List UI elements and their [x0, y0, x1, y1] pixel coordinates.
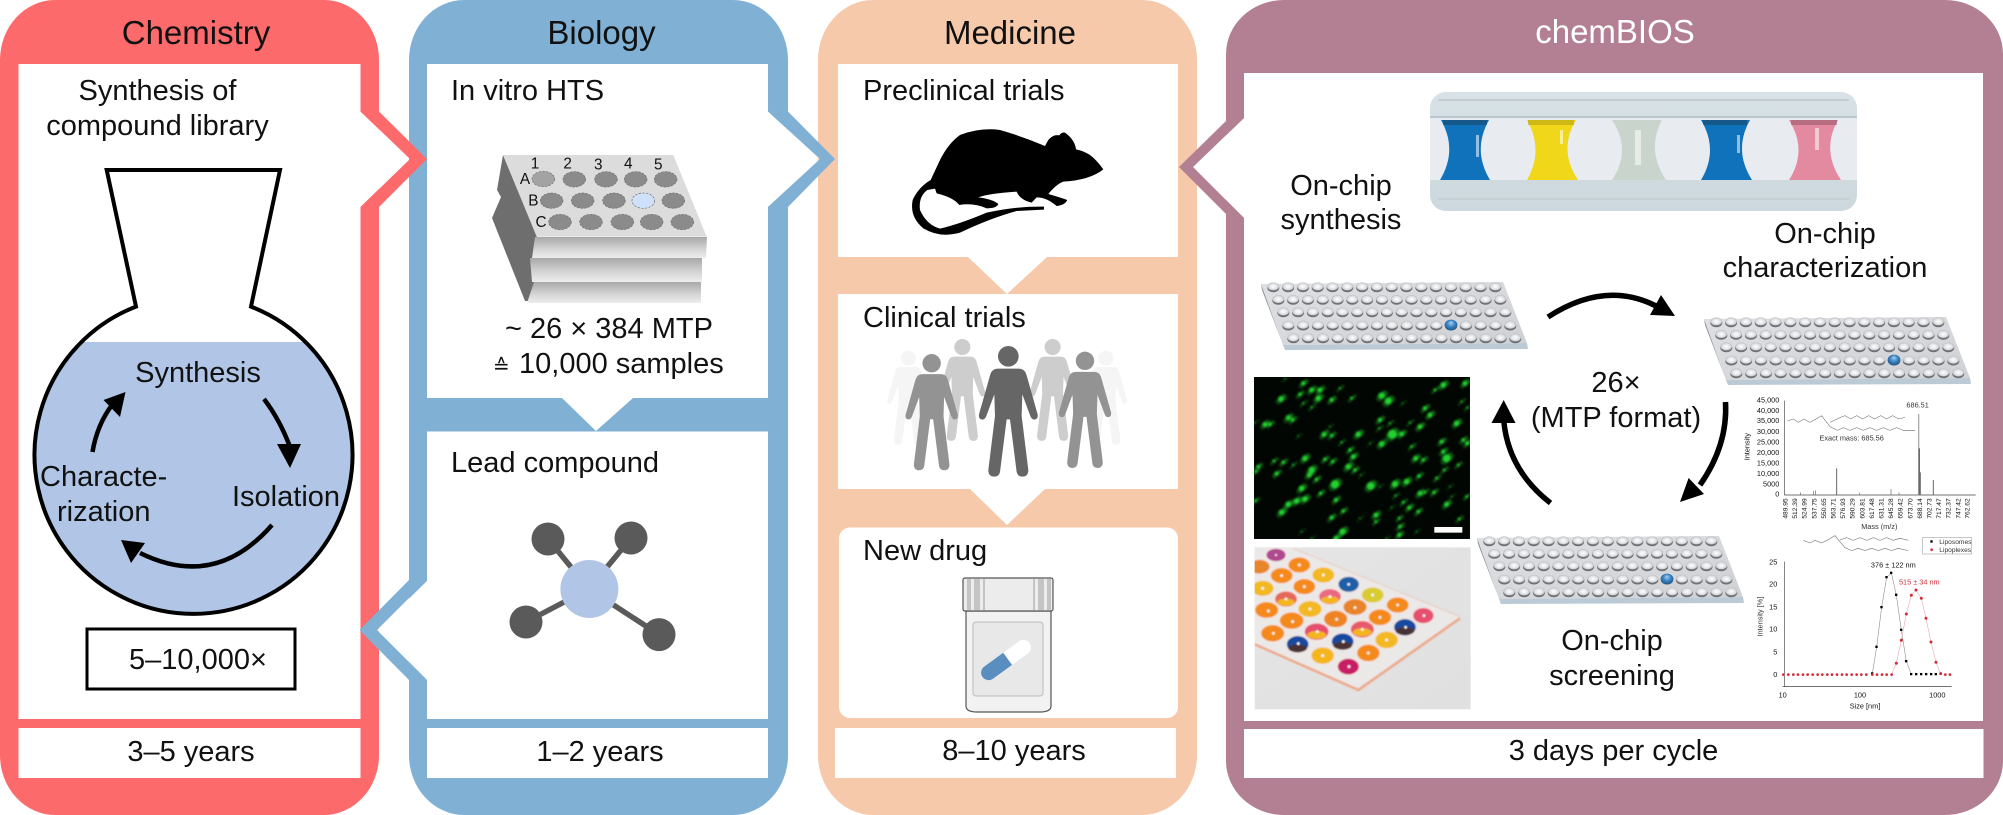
panel: biology: [377, 0, 820, 815]
arrow: isolation to characterization: [121, 525, 272, 566]
photo: coloured droplets on chip: [1430, 92, 1857, 211]
chart: mass spectrum: 45,000: [1757, 396, 1779, 405]
chart: size distribution: Intensity [%]: [1756, 597, 1765, 637]
chart: mass spectrum: 550.65: [1821, 498, 1828, 519]
callout: 5–10,000×: [87, 629, 295, 689]
icon: lead compound molecule: [510, 522, 676, 651]
chart: mass spectrum: 702.73: [1926, 498, 1933, 519]
text: synthesis of compound library: Synthesis of: [79, 75, 237, 107]
icon: stacked well plates: C: [535, 214, 547, 231]
chart: size distribution: 5: [1773, 647, 1777, 656]
chart: mass spectrum: 603.81: [1859, 498, 1866, 519]
heading: chemBIOS: chemBIOS: [1535, 13, 1695, 50]
chart: mass spectrum: 10,000: [1757, 469, 1779, 478]
chart: mass spectrum: Exact mass: 685.56: [1819, 434, 1884, 443]
chart: mass spectrum: 30,000: [1757, 427, 1779, 436]
icon: chip on-chip synthesis: [1261, 282, 1528, 350]
chart: mass spectrum: 617.48: [1869, 498, 1876, 519]
text: 26× (MTP format): 26×: [1591, 367, 1641, 399]
arrow: screening to synthesis: [1492, 400, 1550, 503]
text: 3 days per cycle: 3 days per cycle: [1509, 735, 1718, 767]
chart: mass spectrum: 686.51: [1906, 401, 1929, 410]
icon: chip on-chip screening: [1477, 536, 1744, 604]
label: Characterization: Characte-: [40, 461, 167, 493]
chart: size distribution: 10: [1779, 691, 1787, 700]
text: On-chip characterization: characterization: [1723, 252, 1927, 284]
chart: mass spectrum: 659.42: [1898, 498, 1905, 519]
photo: droplet microarray slide: [1249, 547, 1471, 709]
text: plate count: ≙: [493, 356, 510, 378]
icon: chip on-chip characterization: [1704, 317, 1971, 385]
icon: stacked well plates: 4: [624, 156, 633, 173]
chart: mass spectrum: 20,000: [1757, 448, 1779, 457]
text: On-chip synthesis: synthesis: [1281, 204, 1401, 236]
text: 3–5 years: 3–5 years: [127, 736, 255, 768]
heading: Biology: Biology: [547, 14, 656, 51]
arrow: synthesis to isolation: [264, 399, 301, 468]
icon: stacked well plates: 1: [531, 156, 539, 173]
chart: mass spectrum: 645.28: [1888, 498, 1895, 519]
text: 8–10 years: 8–10 years: [942, 735, 1086, 767]
chart: mass spectrum: Mass (m/z): [1861, 522, 1897, 531]
chart: mass spectrum: 747.42: [1955, 498, 1962, 519]
chart: mass spectrum: 512.39: [1792, 498, 1799, 519]
text: plate count: 10,000 samples: [519, 348, 724, 380]
chart: size distribution: 20: [1769, 580, 1777, 589]
chart: size distribution: Lipoplexes: [1939, 547, 1972, 554]
chart: mass spectrum: [1743, 396, 1976, 531]
label: Synthesis: Synthesis: [135, 357, 261, 389]
icon: pill jar: [963, 578, 1053, 712]
arrow: synthesis to characterization: [1548, 295, 1675, 317]
icon: stacked well plates: 2: [563, 156, 572, 173]
icon: stacked well plates: A: [520, 171, 531, 188]
text: On-chip characterization: On-chip: [1774, 218, 1876, 250]
chart: size distribution: 25: [1769, 557, 1777, 566]
icon: stacked well plates: [492, 155, 707, 303]
arrow: chemBIOS to medicine: [1179, 118, 1244, 218]
chart: mass spectrum: 489.95: [1782, 498, 1789, 519]
chart: mass spectrum: 762.62: [1965, 498, 1972, 519]
icon: stacked well plates: 5: [654, 156, 663, 173]
arrow: characterization to synthesis: [92, 392, 126, 452]
arrow: characterization to screening: [1680, 402, 1726, 502]
icon: mouse silhouette: [912, 129, 1103, 235]
chart: mass spectrum: 688.14: [1917, 498, 1924, 519]
panel: chemistry: [0, 0, 410, 815]
text: Lead compound: Lead compound: [451, 447, 659, 479]
text: plate count: ~ 26 × 384 MTP: [505, 313, 713, 345]
arrow: biology to medicine: [768, 112, 835, 207]
arrow: biology to chemistry: [360, 580, 426, 680]
chart: mass spectrum: 590.29: [1850, 498, 1857, 519]
chart: mass spectrum: 25,000: [1757, 437, 1779, 446]
text: New drug: New drug: [863, 535, 987, 567]
chart: size distribution: 1000: [1929, 691, 1945, 700]
chart: size distribution: 0: [1773, 670, 1777, 679]
chart: size distribution: 376 ± 122 nm: [1871, 561, 1916, 570]
chart: mass spectrum: 537.75: [1811, 498, 1818, 519]
panel: chemBIOS: [1193, 0, 2003, 815]
icon: flask with synthesis cycle: [32, 168, 355, 616]
chart: size distribution: 100: [1854, 691, 1866, 700]
text: On-chip screening: screening: [1549, 660, 1675, 692]
chart: mass spectrum: 563.71: [1830, 498, 1837, 519]
chart: mass spectrum: 717.47: [1936, 498, 1943, 519]
callout: 5–10,000×: 5–10,000×: [129, 644, 267, 676]
text: Clinical trials: Clinical trials: [863, 302, 1026, 334]
chart: mass spectrum: 524.99: [1802, 498, 1809, 519]
panel: medicine: [818, 0, 1197, 815]
text: synthesis of compound library: compound library: [46, 110, 269, 142]
chart: mass spectrum: 0: [1775, 490, 1779, 499]
arrow: chemistry to biology: [360, 112, 427, 207]
label: Isolation: Isolation: [232, 481, 340, 513]
text: On-chip screening: On-chip: [1561, 625, 1663, 657]
chart: size distribution: 15: [1769, 602, 1777, 611]
chart: mass spectrum: 732.37: [1946, 498, 1953, 519]
chart: mass spectrum: 576.93: [1840, 498, 1847, 519]
photo: green fluorescence micrograph: [1252, 376, 1473, 544]
chart: size distribution: 515 ± 34 nm: [1899, 577, 1940, 586]
text: 26× (MTP format): (MTP format): [1531, 402, 1701, 434]
text: On-chip synthesis: On-chip: [1290, 170, 1392, 202]
heading: Medicine: Medicine: [944, 14, 1076, 51]
icon: stacked well plates: 3: [594, 156, 603, 173]
chart: mass spectrum: 35,000: [1757, 416, 1779, 425]
chart: size distribution: Size [nm]: [1850, 701, 1880, 710]
chart: mass spectrum: 40,000: [1757, 406, 1779, 415]
chart: mass spectrum: 5000: [1763, 479, 1779, 488]
chart: mass spectrum: Intensity: [1743, 433, 1752, 460]
heading: Chemistry: Chemistry: [122, 14, 271, 51]
label: Characterization: rization: [57, 496, 150, 528]
chart: mass spectrum: 631.31: [1878, 498, 1885, 519]
text: 1–2 years: 1–2 years: [536, 736, 664, 768]
text: Preclinical trials: Preclinical trials: [863, 75, 1064, 107]
chart: size distribution: Liposomes: [1939, 539, 1972, 546]
chart: mass spectrum: 673.70: [1907, 498, 1914, 519]
chart: mass spectrum: 15,000: [1757, 458, 1779, 467]
icon: stacked well plates: B: [528, 192, 538, 209]
chart: size distribution: 10: [1769, 625, 1777, 634]
chart: size distribution: [1756, 536, 1972, 710]
icon: group of people: [887, 339, 1127, 477]
text: In vitro HTS: In vitro HTS: [451, 75, 604, 107]
